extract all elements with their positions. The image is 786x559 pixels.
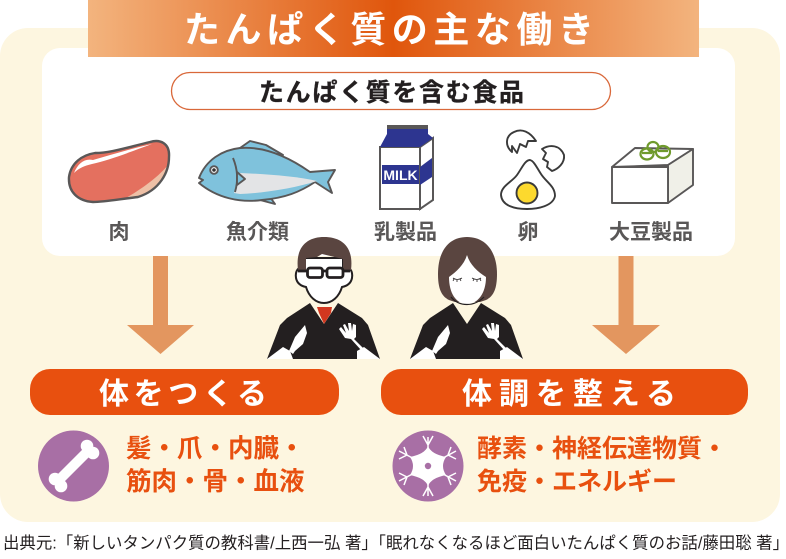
illustration: man eating: [267, 237, 380, 359]
icon: tofu: [612, 142, 693, 203]
icon: bone: [38, 430, 109, 502]
food label: seafood: 魚介類: [226, 221, 289, 244]
icon: meat: [69, 141, 169, 202]
icon: fish: [199, 141, 335, 204]
food label: dairy: 乳製品: [374, 221, 437, 244]
benefits text: body: 髪・爪・内臓・: [126, 435, 305, 463]
food panel: [42, 48, 735, 256]
benefits text: condition: [477, 435, 727, 496]
benefits text: body: 筋肉・骨・血液: [126, 468, 305, 496]
food label: egg: 卵: [518, 221, 538, 244]
arrow: left: [127, 256, 194, 354]
icon: milk carton: MILK: [383, 167, 418, 183]
illustration: woman eating: [410, 237, 523, 359]
icon: neuron: [392, 430, 464, 502]
food label: soy products: 大豆製品: [609, 221, 693, 244]
source note: 出典元:「新しいタンパク質の教科書/上西一弘 著」「眠れなくなるほど面白いたんぱく質のお話/藤田聡 著」: [3, 534, 786, 552]
title banner: [88, 0, 699, 57]
food label: meat: 肉: [108, 221, 130, 244]
benefits text: body: [126, 435, 305, 496]
icon: milk carton: [380, 125, 433, 209]
title banner: たんぱく質の主な働き: [184, 9, 594, 50]
arrow: right: [592, 256, 660, 354]
food panel heading: [172, 72, 610, 110]
pill heading: build the body: 体をつくる: [99, 378, 267, 411]
pill heading: build the body: [30, 369, 339, 415]
food panel heading: たんぱく質を含む食品: [259, 79, 524, 107]
benefits text: condition: 免疫・エネルギー: [477, 468, 677, 496]
icon: egg: [501, 130, 564, 209]
pill heading: regulate condition: 体調を整える: [462, 378, 676, 411]
benefits text: condition: 酵素・神経伝達物質・: [477, 435, 727, 463]
pill heading: regulate condition: [381, 369, 748, 415]
